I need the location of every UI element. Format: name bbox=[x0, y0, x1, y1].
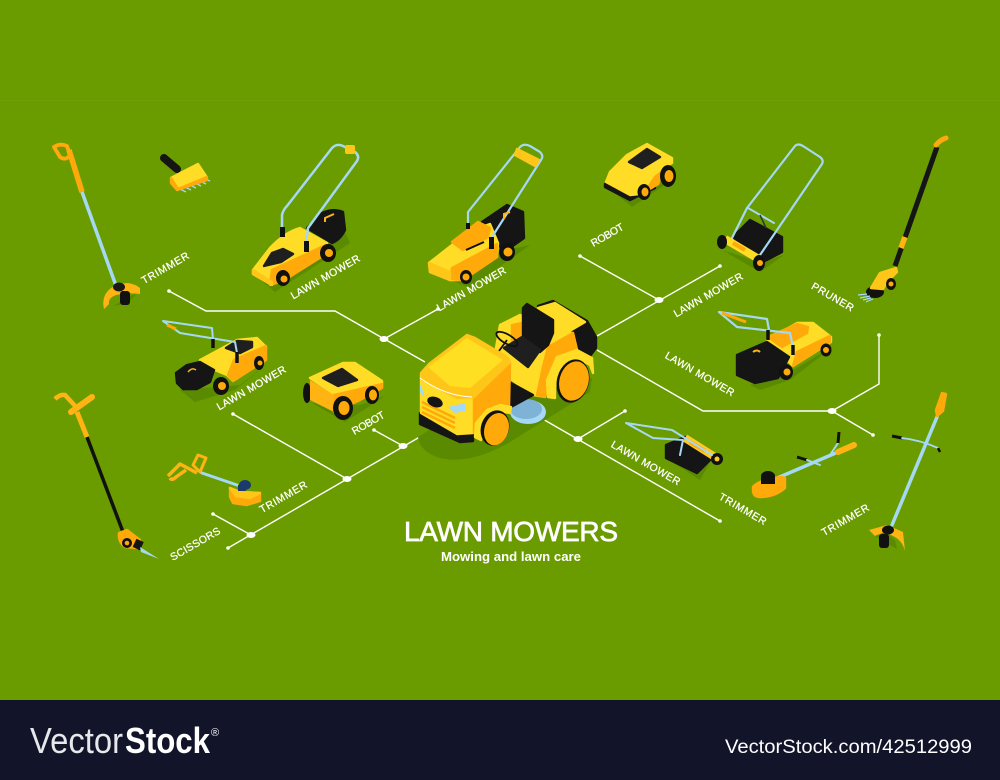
icon: lawn mower left bbox=[163, 321, 270, 402]
front wheel bbox=[475, 405, 511, 440]
icon: trimmer far right bbox=[869, 393, 946, 551]
label: trimmer 1: TRIMMER bbox=[140, 250, 192, 287]
rear wheel bbox=[547, 350, 593, 398]
icon: trimmer left bbox=[168, 455, 260, 505]
label: lawn mower 6: LAWN MOWER bbox=[609, 439, 683, 488]
icon: trimmer centre right bbox=[753, 432, 854, 497]
icon: reel lawn mower bbox=[717, 144, 823, 272]
footer url: VectorStock.com/42512999 bbox=[725, 737, 972, 758]
footer logo: Vector: Vector bbox=[30, 720, 123, 761]
footer logo: Stock: Stock bbox=[125, 720, 211, 761]
subtitle: Mowing and lawn care bbox=[441, 549, 581, 564]
hood bbox=[420, 413, 473, 442]
icon: robot mower top bbox=[605, 144, 676, 207]
icon: lawn mower 1 bbox=[253, 145, 358, 292]
label: pruner: PRUNER bbox=[809, 280, 856, 315]
shadow bbox=[418, 378, 592, 460]
label: lawn mower 3: LAWN MOWER bbox=[672, 271, 746, 320]
title: LAWN MOWERS bbox=[404, 516, 618, 547]
footer bar bbox=[0, 700, 1000, 780]
icon: ride-on tractor mower bbox=[418, 301, 596, 460]
label: trimmer 2: TRIMMER bbox=[258, 479, 310, 516]
icon: pruner bbox=[858, 138, 946, 302]
seat bbox=[523, 304, 553, 352]
label: lawn mower 4: LAWN MOWER bbox=[663, 350, 737, 399]
label: lawn mower 1: LAWN MOWER bbox=[289, 253, 363, 302]
label: robot 1: ROBOT bbox=[589, 221, 627, 250]
grille bbox=[422, 402, 455, 428]
icon: trimmer top left bbox=[54, 145, 140, 309]
icon: lawn mower 2 bbox=[429, 145, 542, 288]
label: scissors: SCISSORS bbox=[168, 525, 223, 564]
label: trimmer 3: TRIMMER bbox=[717, 491, 769, 528]
labels bbox=[140, 221, 872, 564]
cutting disc bbox=[510, 399, 546, 424]
rear deck bbox=[538, 301, 596, 356]
label: lawn mower 2: LAWN MOWER bbox=[435, 265, 509, 314]
icon: lawn mower right bbox=[719, 312, 835, 390]
label: robot 2: ROBOT bbox=[350, 409, 388, 438]
body bbox=[496, 315, 577, 397]
label: lawn mower 5: LAWN MOWER bbox=[215, 364, 289, 413]
registered mark: ® bbox=[211, 727, 219, 739]
label: trimmer 4: TRIMMER bbox=[820, 502, 872, 539]
icon: hand rake bbox=[164, 158, 210, 192]
icon: reel mower bottom bbox=[626, 423, 723, 480]
connector lines bbox=[167, 254, 881, 550]
icon: shears bottom left bbox=[55, 395, 159, 559]
icon: robot mower left bbox=[303, 363, 385, 422]
steering wheel bbox=[494, 329, 520, 351]
